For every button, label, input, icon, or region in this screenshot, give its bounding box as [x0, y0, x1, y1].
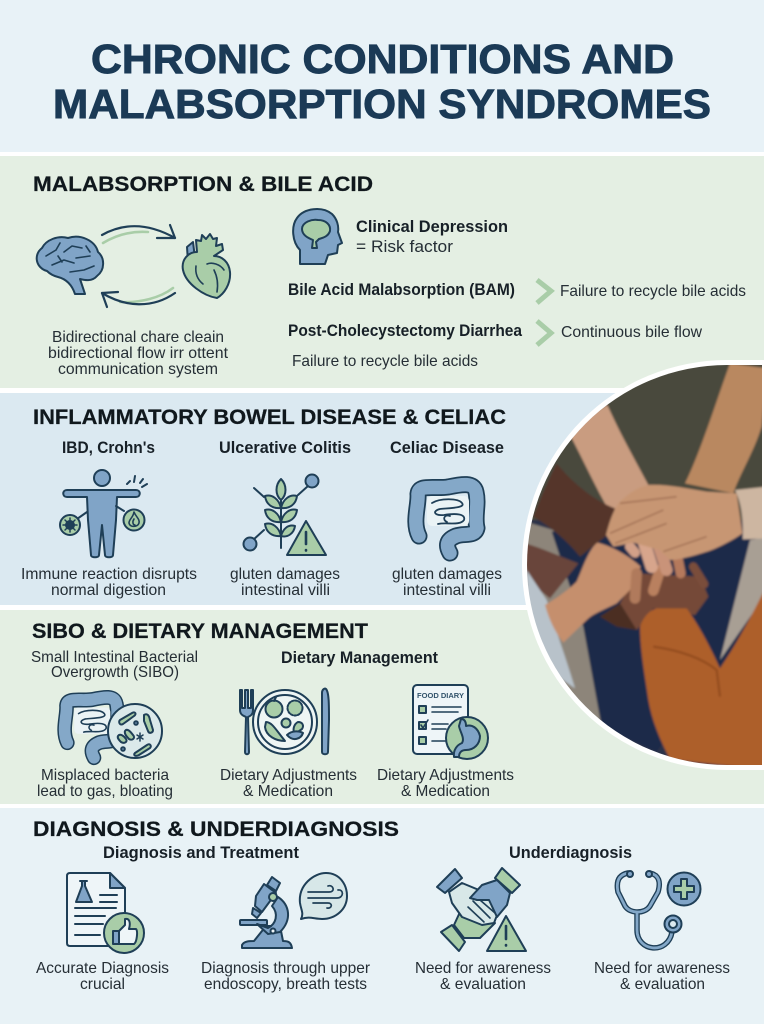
- text: bidirectional caption: [48, 329, 229, 378]
- text: bidirectional caption: Bidirectional chare cleain: [52, 329, 224, 346]
- caption: accurate diagnosis: Accurate Diagnosis: [36, 960, 169, 977]
- caption: gluten one: gluten damages: [230, 566, 340, 583]
- title: CHRONIC CONDITIONS AND: [91, 36, 674, 82]
- subheading: small intestinal bacterial overgrowth: Small Intestinal Bacterial: [31, 649, 198, 666]
- subheading: underdiagnosis: Underdiagnosis: [509, 844, 632, 862]
- icon: colon with bacteria: [65, 697, 162, 758]
- text: bidirectional caption: communication system: [58, 361, 218, 378]
- icon: report with thumbs up: [67, 873, 144, 953]
- icon: wheat with warning: [244, 474, 326, 555]
- subheading: celiac: Celiac Disease: [390, 439, 504, 457]
- icon: colon: [416, 485, 477, 553]
- icon: heart: [183, 234, 230, 298]
- caption: dietary adjustments one: Dietary Adjustments: [220, 767, 357, 784]
- text: continuous bile flow: Continuous bile flow: [561, 324, 702, 341]
- caption: need for awareness two: & evaluation: [620, 976, 705, 993]
- panel: inflammatory bowel disease and celiac: [0, 393, 764, 605]
- caption: upper endoscopy: Diagnosis through upper: [201, 960, 371, 977]
- caption: immune reaction: Immune reaction disrupts: [21, 566, 197, 583]
- panel: SIBO and dietary management: [0, 610, 764, 804]
- text: clinical depression: Clinical Depression: [356, 218, 508, 236]
- text: post-cholecystectomy diarrhea: Post-Cholecystectomy Diarrhea: [288, 322, 523, 340]
- caption: need for awareness two: [594, 960, 730, 993]
- icon: bidirectional arrows: [102, 225, 175, 307]
- caption: dietary adjustments one: & Medication: [243, 783, 333, 800]
- icon: food diary: [413, 685, 488, 759]
- text: failure to recycle: Failure to recycle bile acids: [560, 283, 746, 300]
- caption: gluten two: intestinal villi: [403, 582, 491, 599]
- title: [53, 36, 711, 127]
- caption: need for awareness one: & evaluation: [440, 976, 526, 993]
- icon: immune body: [60, 470, 147, 557]
- icon: head with brain: [293, 209, 342, 264]
- caption: misplaced bacteria: [37, 767, 173, 800]
- icon: food diary: FOOD DIARY: [417, 691, 464, 700]
- panel: malabsorption and bile acid: [0, 156, 764, 388]
- subheading: small intestinal bacterial overgrowth: Overgrowth (SIBO): [51, 664, 179, 681]
- text: failure note: Failure to recycle bile acids: [292, 353, 478, 370]
- caption: gluten two: gluten damages: [392, 566, 502, 583]
- caption: upper endoscopy: endoscopy, breath tests: [204, 976, 367, 993]
- text: bile acid malabsorption: Bile Acid Malabsorption (BAM): [288, 281, 515, 299]
- heading: inflammatory: INFLAMMATORY BOWEL DISEASE & CELIAC: [33, 405, 506, 429]
- caption: gluten two: [392, 566, 502, 599]
- icon: handshake with warning: [437, 868, 526, 951]
- caption: immune reaction: [21, 566, 197, 599]
- caption: need for awareness one: [415, 960, 551, 993]
- icon: chevron two: [537, 321, 551, 345]
- icon: stethoscope with medical cross: [617, 871, 700, 948]
- heading: diagnosis: DIAGNOSIS & UNDERDIAGNOSIS: [33, 817, 399, 841]
- caption: dietary adjustments two: & Medication: [401, 783, 490, 800]
- text: clinical depression: = Risk factor: [356, 237, 453, 256]
- caption: need for awareness two: Need for awareness: [594, 960, 730, 977]
- caption: accurate diagnosis: crucial: [80, 976, 125, 993]
- caption: dietary adjustments two: [377, 767, 514, 800]
- icon: chevron one: [537, 280, 551, 303]
- caption: misplaced bacteria: lead to gas, bloating: [37, 783, 173, 800]
- subheading: dietary management: Dietary Management: [281, 649, 438, 667]
- caption: misplaced bacteria: Misplaced bacteria: [41, 767, 169, 784]
- subheading: IBD: IBD, Crohn's: [62, 439, 155, 457]
- caption: dietary adjustments one: [220, 767, 357, 800]
- icon: brain: [37, 237, 103, 294]
- text: bidirectional caption: bidirectional flow irr ottent: [48, 345, 229, 362]
- photo: stacked hands in a circle: [517, 357, 764, 773]
- subheading: diagnosis and treatment: Diagnosis and Treatment: [103, 844, 299, 862]
- caption: immune reaction: normal digestion: [51, 582, 166, 599]
- heading: malabsorption: MALABSORPTION & BILE ACID: [33, 172, 373, 196]
- caption: gluten one: [230, 566, 340, 599]
- caption: gluten one: intestinal villi: [241, 582, 330, 599]
- subheading: small intestinal bacterial overgrowth: [31, 649, 198, 681]
- heading: SIBO: SIBO & DIETARY MANAGEMENT: [32, 619, 368, 643]
- text: clinical depression: [356, 218, 508, 256]
- title: MALABSORPTION SYNDROMES: [53, 81, 711, 127]
- subheading: ulcerative colitis: Ulcerative Colitis: [219, 439, 351, 457]
- caption: need for awareness one: Need for awareness: [415, 960, 551, 977]
- panel: diagnosis and underdiagnosis: [0, 808, 764, 1024]
- icon: microscope with breath bubble: [240, 873, 347, 948]
- caption: accurate diagnosis: [36, 960, 169, 993]
- caption: dietary adjustments two: Dietary Adjustments: [377, 767, 514, 784]
- icon: plate and cutlery: [240, 689, 329, 754]
- panel: title banner: [0, 0, 764, 152]
- caption: upper endoscopy: [201, 960, 371, 993]
